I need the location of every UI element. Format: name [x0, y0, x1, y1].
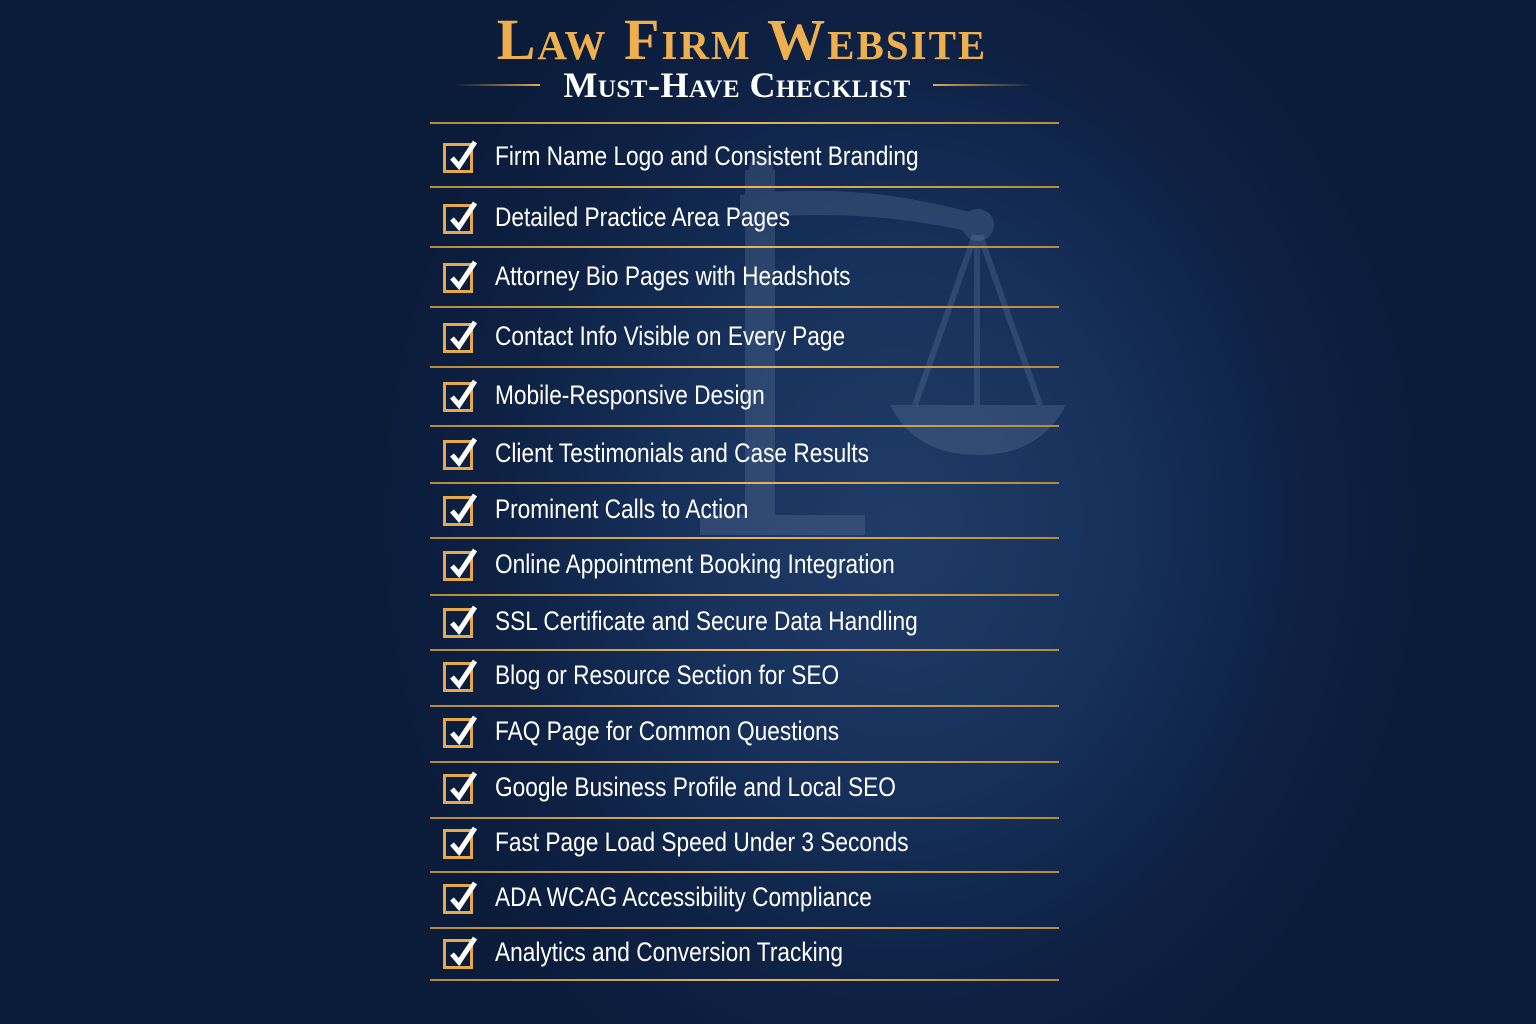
item 14: ADA WCAG Accessibility Compliance	[495, 882, 872, 912]
item 9: SSL Certificate and Secure Data Handling	[495, 606, 918, 636]
item 12: Google Business Profile and Local SEO	[495, 772, 896, 802]
item 7: Prominent Calls to Action	[495, 494, 748, 524]
item 5: Mobile-Responsive Design	[495, 380, 765, 410]
item 3: Attorney Bio Pages with Headshots	[495, 261, 851, 291]
item 8: Online Appointment Booking Integration	[495, 549, 895, 579]
title: Law Firm Website	[497, 7, 987, 72]
item 1: Firm Name Logo and Consistent Branding	[495, 141, 919, 171]
item 6: Client Testimonials and Case Results	[495, 438, 869, 468]
subtitle: Must-Have Checklist	[563, 65, 911, 105]
item 4: Contact Info Visible on Every Page	[495, 321, 845, 351]
item 2: Detailed Practice Area Pages	[495, 202, 790, 232]
item 13: Fast Page Load Speed Under 3 Seconds	[495, 827, 909, 857]
item 11: FAQ Page for Common Questions	[495, 716, 839, 746]
checklist	[443, 140, 919, 969]
item 15: Analytics and Conversion Tracking	[495, 937, 843, 967]
item 10: Blog or Resource Section for SEO	[495, 660, 839, 690]
